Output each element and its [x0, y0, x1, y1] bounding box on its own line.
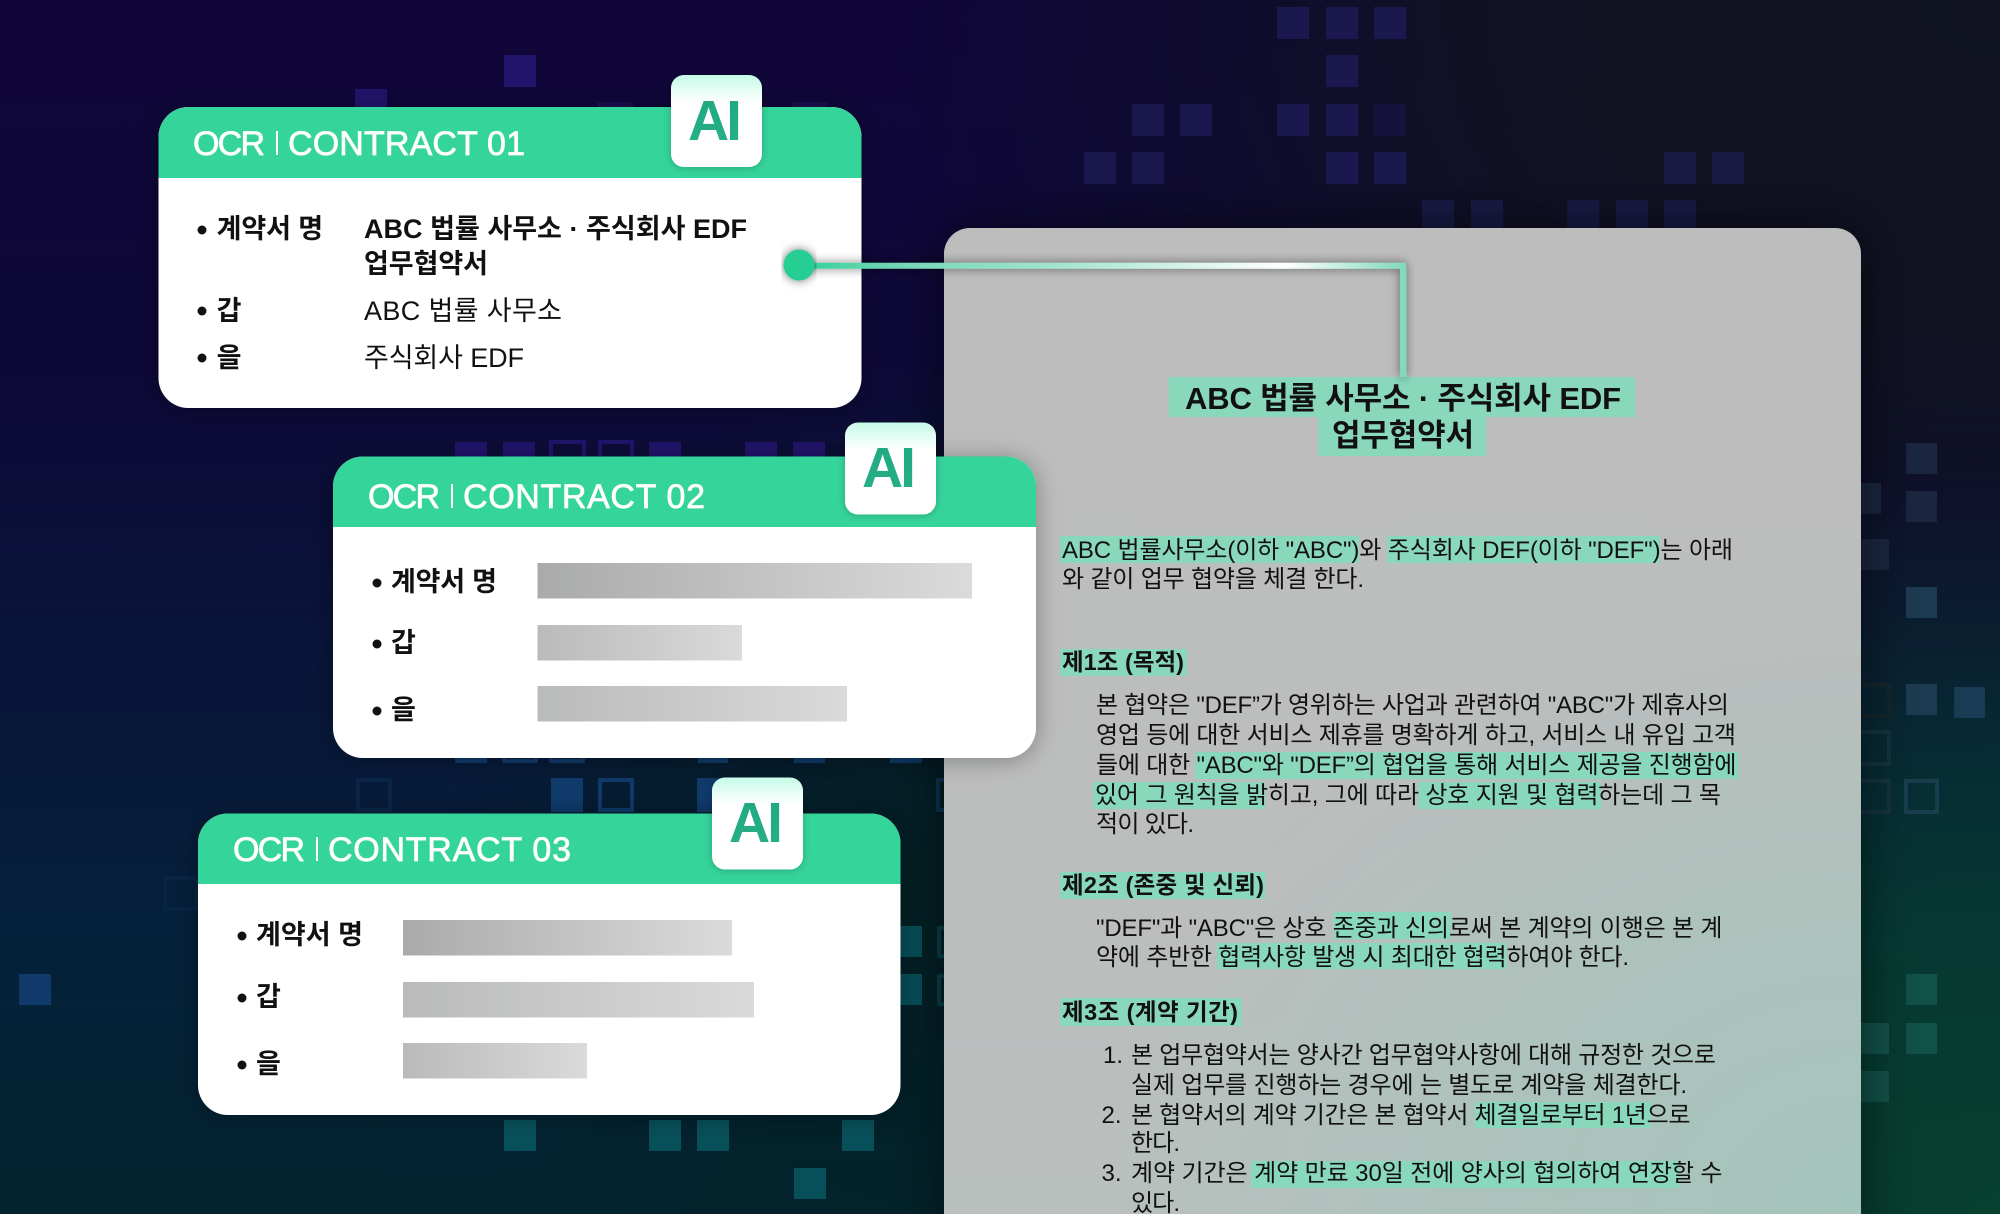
card 01 fields: ABC 법률 사무소 — [364, 296, 562, 326]
card 01 fields: 계약서 명 — [217, 214, 323, 244]
document title — [1185, 381, 1621, 453]
icon: AI badge 01 — [671, 75, 762, 167]
icon: AI badge 02 — [845, 422, 936, 514]
card 03 title: OCR — [233, 831, 305, 869]
article 3 list: 본 협약서의 계약 기간은 본 협약서 체결일로부터 1년으로 — [1131, 1102, 1690, 1129]
article 3 list: 3. — [1102, 1160, 1122, 1187]
article 3 list: 1. — [1103, 1042, 1123, 1069]
card 03 fields — [238, 920, 363, 1079]
article 2 body: 약에 추반한 협력사항 발생 시 최대한 협력하여야 한다. — [1096, 944, 1629, 971]
intro paragraph: 와 같이 업무 협약을 체결 한다. — [1062, 566, 1364, 593]
icon: AI badge 02: AI — [862, 436, 916, 500]
panel: contract document — [944, 228, 1861, 1214]
document title: 업무협약서 — [1332, 418, 1474, 453]
article 1 body: 본 협약은 "DEF”가 영위하는 사업과 관련하여 "ABC"가 제휴사의 — [1096, 692, 1729, 719]
card 03 redacted bars — [403, 920, 754, 1078]
article 1 body: 있어 그 원칙을 밝히고, 그에 따라 상호 지원 및 협력하는데 그 목 — [1095, 782, 1721, 809]
card: contract 02 — [333, 422, 1036, 758]
card 02 fields: 갑 — [391, 628, 416, 658]
article 3 heading: 제3조 (계약 기간) — [1062, 999, 1238, 1025]
icon: AI badge 01: AI — [688, 89, 742, 153]
card: contract 01 — [158, 75, 862, 408]
article 3 list: 계약 기간은 계약 만료 30일 전에 양사의 협의하여 연장할 수 — [1131, 1160, 1722, 1187]
card: contract 03 — [198, 778, 900, 1115]
card 01 fields: 업무협약서 — [364, 249, 488, 279]
card 03 title: CONTRACT 03 — [328, 831, 571, 869]
card 01 title: OCR — [193, 125, 265, 163]
article 1 heading: 제1조 (목적) — [1062, 649, 1184, 675]
article 3 list: 2. — [1102, 1102, 1122, 1129]
article 3 list: 본 업무협약서는 양사간 업무협약사항에 대해 규정한 것으로 — [1131, 1042, 1716, 1069]
card 02 fields: 계약서 명 — [391, 567, 497, 597]
card 01 fields: ABC 법률 사무소 · 주식회사 EDF — [364, 214, 747, 244]
card 02 title: OCR — [368, 478, 440, 516]
intro paragraph: ABC 법률사무소(이하 "ABC")와 주식회사 DEF(이하 "DEF")는 아래 — [1062, 537, 1733, 564]
article 1 body — [1095, 692, 1736, 838]
card 02 redacted bars — [538, 563, 972, 722]
article 3 list: 실제 업무를 진행하는 경우에 는 별도로 계약을 체결한다. — [1131, 1072, 1687, 1099]
icon: AI badge 03: AI — [729, 791, 783, 855]
card 03 fields: 갑 — [256, 982, 281, 1012]
card 02 title: CONTRACT 02 — [463, 478, 705, 516]
card 03 fields: 계약서 명 — [256, 920, 363, 950]
article 2 body — [1096, 915, 1722, 971]
card 01 fields: 갑 — [217, 296, 242, 326]
intro paragraph — [1062, 537, 1733, 593]
card 03 fields: 을 — [256, 1049, 281, 1079]
article 1 body: 적이 있다. — [1096, 811, 1194, 838]
document title: ABC 법률 사무소 · 주식회사 EDF — [1185, 381, 1621, 416]
article 1 body: 들에 대한 "ABC"와 "DEF”의 협업을 통해 서비스 제공을 진행함에 — [1096, 752, 1736, 779]
card 01 fields: 을 — [217, 343, 241, 373]
card 01 fields — [198, 214, 747, 373]
card 01 title: CONTRACT 01 — [288, 125, 525, 163]
article 3 list: 한다. — [1131, 1130, 1180, 1157]
document highlights — [1060, 377, 1738, 1188]
article 1 body: 영업 등에 대한 서비스 제휴를 명확하게 하고, 서비스 내 유입 고객 — [1096, 722, 1736, 749]
article 2 heading: 제2조 (존중 및 신뢰) — [1062, 872, 1264, 898]
card 02 fields: 을 — [391, 695, 416, 725]
card 01 fields: 주식회사 EDF — [364, 343, 524, 373]
card 02 fields — [372, 567, 497, 725]
article 3 list — [1102, 1042, 1722, 1214]
arrow: connector from card 01 to document title — [784, 250, 1406, 377]
article 2 body: "DEF"과 "ABC"은 상호 존중과 신의로써 본 계약의 이행은 본 계 — [1096, 915, 1722, 942]
icon: AI badge 03 — [712, 778, 803, 870]
